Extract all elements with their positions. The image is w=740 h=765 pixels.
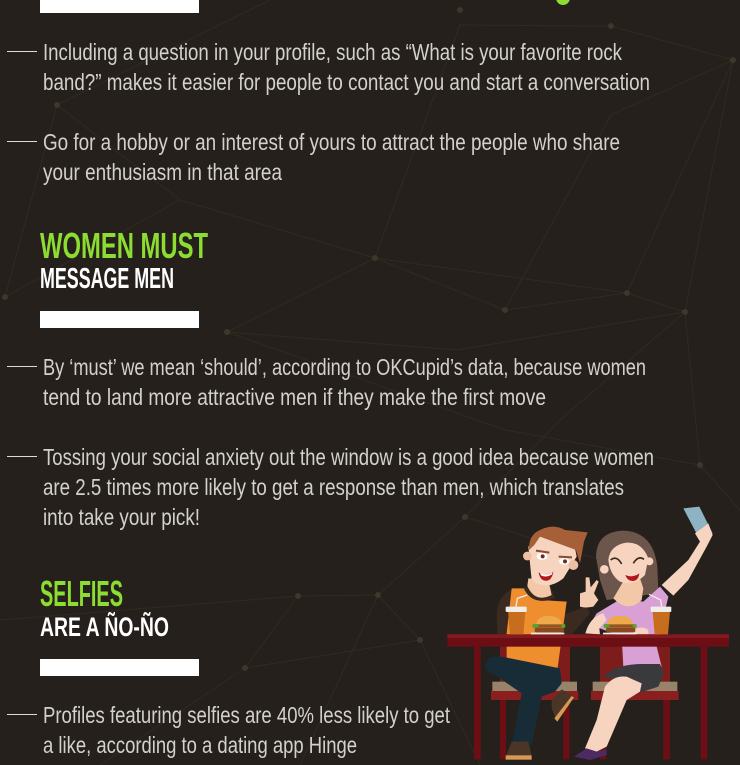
white bar [40,311,199,328]
white bar [40,659,199,676]
table [447,634,729,759]
tip: women should move first [7,354,646,410]
burgers [531,616,637,634]
heading: selfies are a no-no [40,573,169,642]
icon: green timeline dot [556,0,570,5]
drinks [506,594,671,634]
woman [574,507,713,760]
tip: hobby or interest: your enthusiasm in that area [43,159,283,185]
tip: question in your profile [7,39,650,95]
tip: hobby or interest [7,129,620,185]
man [485,527,599,760]
heading: women must message men: WOMEN MUST [40,225,208,266]
heading: selfies are a no-no: ARE A ÑO-ÑO [40,611,169,642]
heading: selfies are a no-no: SELFIES [40,573,123,614]
tip: selfies get fewer likes [7,702,450,758]
tip: social anxiety [7,444,654,530]
top white bar [40,0,199,13]
heading: women must message men: MESSAGE MEN [40,263,174,295]
chairs [491,647,679,759]
illustration: couple taking a selfie at a table [447,507,729,760]
tip: selfies get fewer likes: Profiles featuring selfies are 40% less likely to get [43,702,450,728]
tip: hobby or interest: Go for a hobby or an interest of yours to attract the people who share [43,129,620,155]
tip: social anxiety: into take your pick! [43,504,200,530]
heading: women must message men [40,225,208,295]
tip: women should move first: tend to land more attractive men if they make the first move [43,384,546,410]
tip: selfies get fewer likes: a like, according to a dating app Hinge [43,732,357,758]
